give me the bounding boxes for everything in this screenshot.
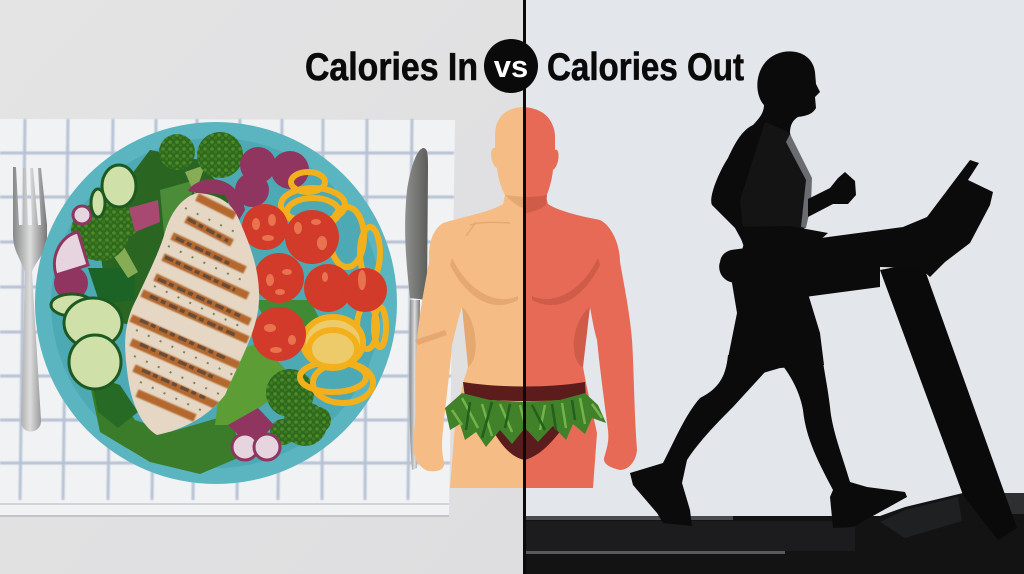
underwear	[463, 382, 586, 460]
plate well	[51, 138, 381, 468]
icon: knife	[405, 148, 428, 470]
left background	[0, 0, 524, 574]
right background	[524, 0, 1024, 574]
yellow pepper rings	[281, 172, 386, 403]
title: calories in: Calories In	[305, 46, 478, 89]
grilled chicken breast	[125, 193, 259, 435]
red onion	[54, 147, 309, 460]
runner rear forearm	[737, 226, 828, 250]
runner upper body with head	[711, 51, 820, 250]
cherry tomatoes	[242, 204, 387, 361]
center divider line	[523, 0, 526, 574]
human body figure, split in two colours	[413, 107, 637, 488]
title	[305, 39, 744, 93]
treadmill base	[525, 493, 1024, 574]
runner front arm	[808, 172, 856, 217]
treadmill and runner silhouette	[525, 51, 1024, 574]
broccoli	[71, 132, 331, 446]
title: calories out: Calories Out	[547, 46, 744, 89]
cucumber slices	[51, 165, 136, 389]
body: right half, coral	[520, 107, 637, 488]
leafy greens	[88, 150, 325, 474]
body: left half, peach	[413, 107, 525, 488]
runner	[630, 51, 907, 528]
vs badge	[484, 39, 538, 93]
runner shorts	[728, 240, 824, 373]
runner front leg and shoe	[783, 362, 907, 528]
runner rear leg and shoe	[630, 355, 765, 526]
napkin with blue gingham	[0, 119, 455, 517]
panel: salad plate	[35, 122, 397, 484]
runner tank edge highlight	[786, 134, 812, 228]
leaf skirt	[445, 393, 606, 447]
icon: fork	[13, 167, 47, 432]
plate	[35, 122, 397, 484]
runner torso and tank top	[740, 122, 811, 250]
vs badge: vs	[494, 49, 528, 84]
treadmill upright	[880, 262, 1017, 540]
treadmill console	[719, 160, 993, 297]
